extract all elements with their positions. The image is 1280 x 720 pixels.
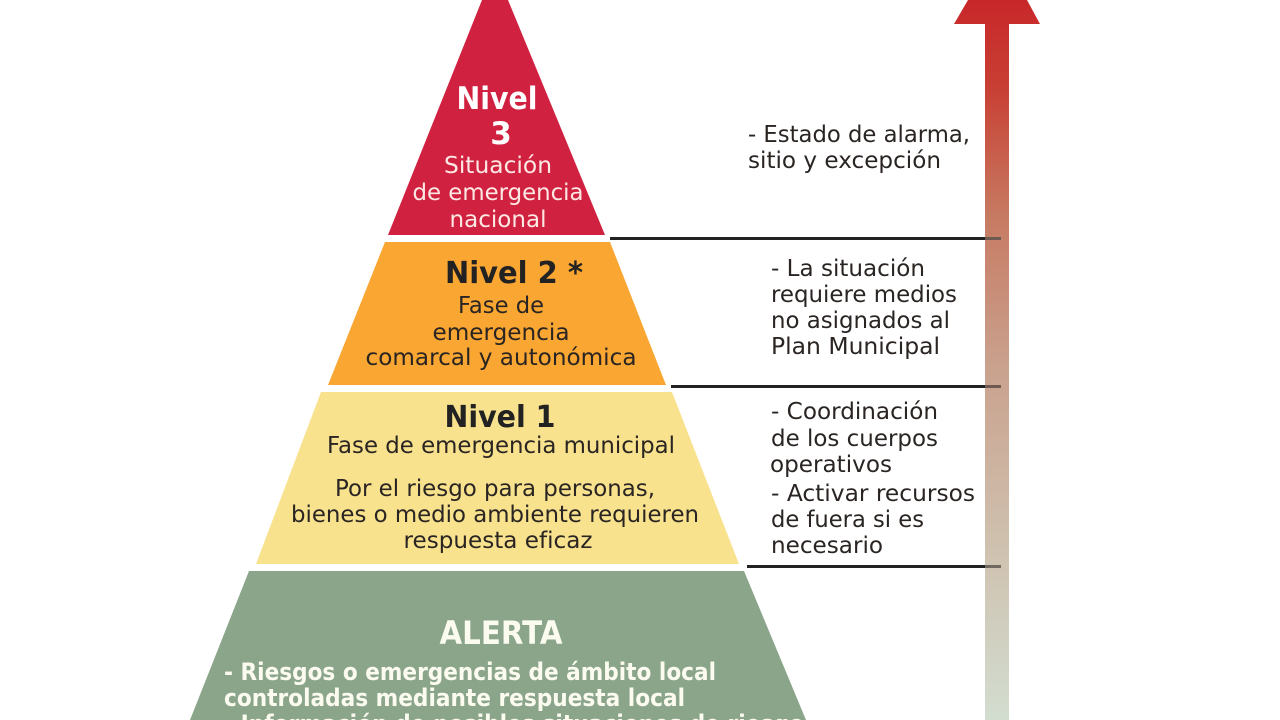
text: fase de emergencia comarcal y autonómica: comarcal y autonómica [366,345,636,371]
panel: nivel 2 [328,242,666,385]
text: criterio nivel 2: - La situación [771,256,925,282]
text: fase de emergencia comarcal y autonómica [366,293,636,371]
text: situación de emergencia nacional: de emergencia [412,180,584,206]
text: criterio nivel 2: no asignados al [771,308,950,334]
text: criterio nivel 1: de fuera si es [771,507,924,533]
text: situación de emergencia nacional [412,153,584,233]
panel: alerta [190,571,806,720]
text: criterio nivel 1 [770,399,975,559]
text: criterio nivel 3 [748,122,970,174]
text: fase de emergencia municipal: Fase de emergencia municipal [327,433,675,459]
text: por el riesgo: respuesta eficaz [404,528,592,554]
text: criterio nivel 3: - Estado de alarma, [748,122,970,148]
text: situación de emergencia nacional: nacional [450,207,546,233]
panel: nivel 3 [388,0,605,235]
heading: alerta: ALERTA [440,614,563,652]
heading: nivel 2: Nivel 2 * [445,256,583,291]
divider line: nivel 1 [747,565,986,568]
heading: nivel 3: Nivel [456,81,538,117]
text: criterio nivel 1: necesario [771,533,883,559]
heading: number 3: 3 [490,116,512,152]
text: criterio nivel 2: requiere medios [771,282,957,308]
text: criterio nivel 1: - Activar recursos [771,481,975,507]
text: situación de emergencia nacional: Situación [444,153,552,179]
text: criterio nivel 2 [771,256,957,360]
text: por el riesgo: bienes o medio ambiente requieren [291,502,699,528]
text: fase de emergencia comarcal y autonómica: emergencia [432,320,570,346]
text: alerta list: - Riesgos o emergencias de ámbito local [224,658,716,686]
text: criterio nivel 3: sitio y excepción [748,148,941,174]
text: fase de emergencia comarcal y autonómica: Fase de [458,293,544,319]
text: alerta list [224,658,804,720]
text: por el riesgo [291,476,699,554]
text: criterio nivel 1: de los cuerpos [771,426,938,452]
divider line: nivel 2 [671,385,986,388]
divider line: nivel 3 [610,237,986,240]
vertical gradient arrow [954,0,1040,720]
panel: nivel 1 [256,392,739,564]
text: criterio nivel 1: operativos [770,452,892,478]
text: criterio nivel 1: - Coordinación [771,399,938,425]
text: alerta list: controladas mediante respuesta local [224,684,685,712]
heading: nivel 1: Nivel 1 [444,400,556,435]
text: por el riesgo: Por el riesgo para personas, [335,476,655,502]
text: criterio nivel 2: Plan Municipal [771,334,940,360]
